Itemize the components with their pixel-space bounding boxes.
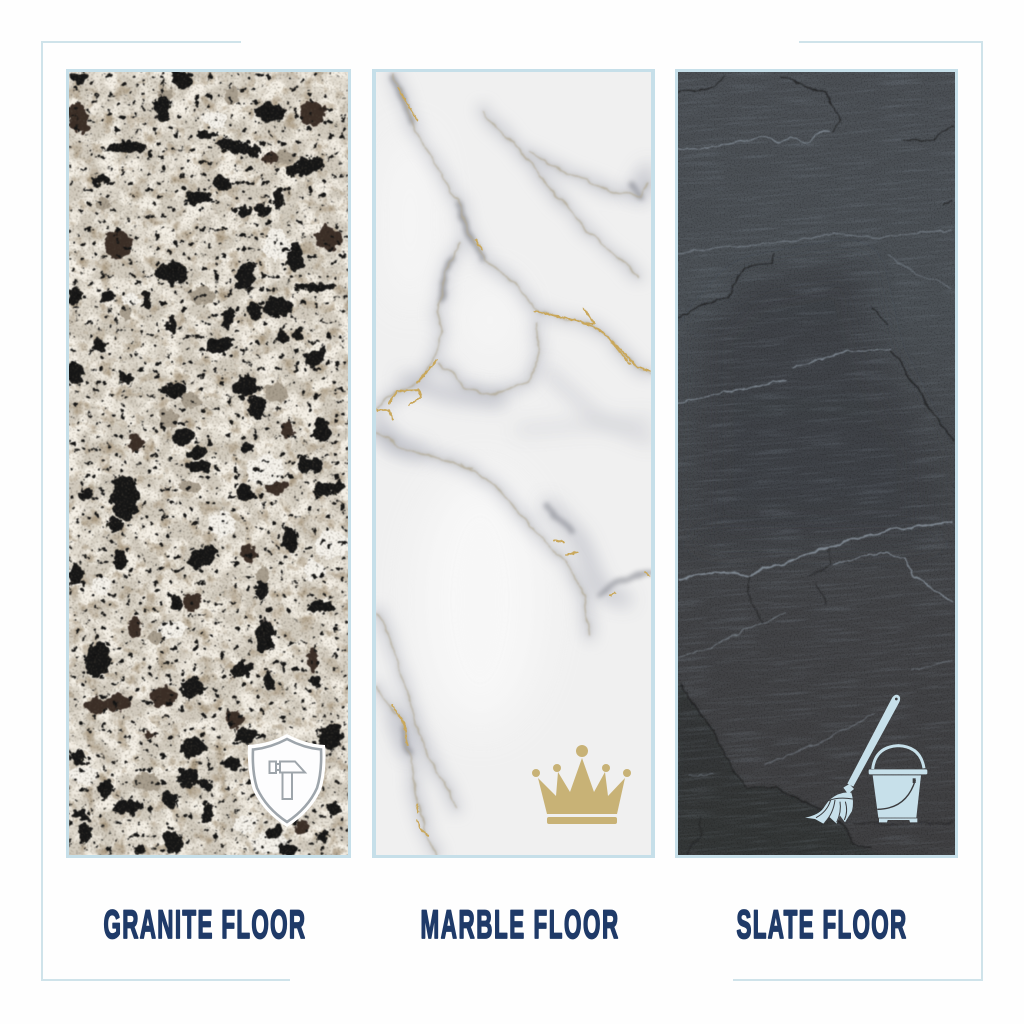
heading: granite floor: GRANITE FLOOR [104, 902, 305, 947]
panel: marble floor [372, 69, 655, 858]
gold veins [377, 88, 650, 836]
icon: shield with hammer [248, 734, 326, 827]
icon: gold crown [532, 745, 631, 824]
light veins [678, 130, 953, 775]
broad grey wash around veins [377, 73, 650, 855]
darker slabs [704, 266, 908, 444]
icon: mop and bucket [805, 695, 927, 824]
thin tan veins [377, 73, 650, 855]
panel: slate floor [675, 69, 958, 858]
mid grey veins [377, 73, 650, 855]
bright areas [388, 130, 545, 730]
dark cracks [678, 75, 953, 855]
panel: granite floor [64, 69, 351, 858]
heading: slate floor: SLATE FLOOR [736, 902, 906, 947]
heading: marble floor: MARBLE FLOOR [420, 902, 618, 947]
